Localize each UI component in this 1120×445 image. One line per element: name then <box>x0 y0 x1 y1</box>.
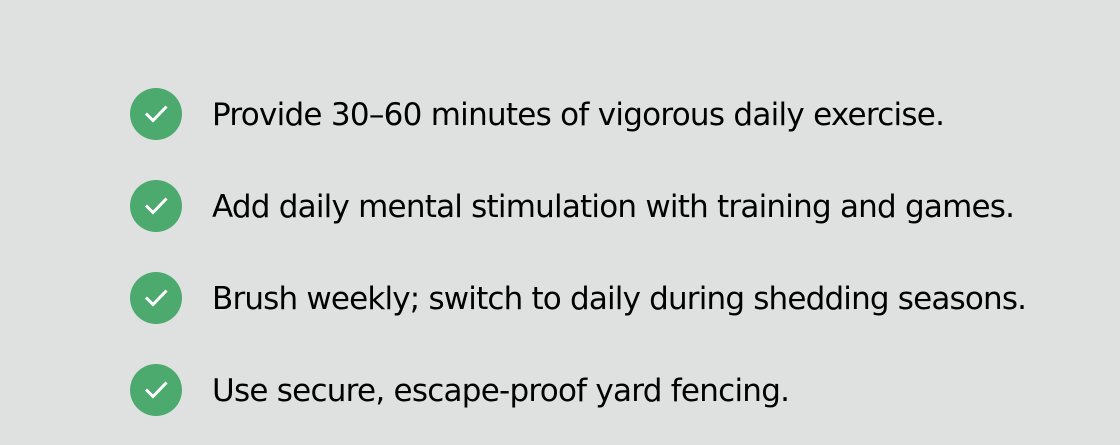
item 3 <box>130 272 1027 324</box>
item 1 <box>130 88 945 140</box>
item 4 <box>130 364 790 416</box>
item 2 <box>130 180 1015 232</box>
icon: check 2 <box>130 180 182 232</box>
text 2: Add daily mental stimulation with training and games. <box>212 189 1015 225</box>
icon: check 3 <box>130 272 182 324</box>
text 3: Brush weekly; switch to daily during shedding seasons. <box>212 281 1027 317</box>
text 1: Provide 30–60 minutes of vigorous daily exercise. <box>212 97 945 133</box>
icon: check 1 <box>130 88 182 140</box>
icon: check 4 <box>130 364 182 416</box>
text 4: Use secure, escape-proof yard fencing. <box>212 373 790 409</box>
